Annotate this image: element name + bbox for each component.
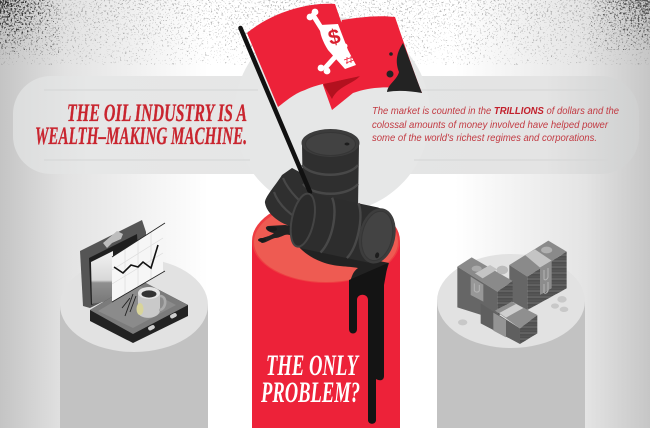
dollar sign: $ [326,25,343,50]
red pedestal [252,199,400,428]
oil spill on red pedestal [258,225,389,285]
flag rear panel [323,16,422,110]
flag front panel [247,4,360,107]
oil drip [349,263,388,424]
pedestal caption: THE ONLY [266,349,360,382]
paragraph: The market is counted in the TRILLIONS of dollars and the [372,105,619,117]
stack rear right [509,241,567,310]
briefcase base [90,280,188,343]
flag pole [240,28,310,192]
speech panel [13,17,639,213]
coins [458,296,568,325]
flag fold [323,76,360,99]
stack front [481,302,537,344]
grunge texture [0,0,650,65]
paragraph: colossal amounts of money involved have helped power [372,119,608,131]
heading: THE OIL INDUSTRY IS A [67,100,247,127]
barrel: tipped over [286,190,401,267]
icon: skull and crossbones [307,9,356,74]
coffee mug [136,287,165,318]
chart stand lines [122,294,136,316]
pedestal caption: PROBLEM? [260,376,360,409]
briefcase lid [80,220,146,308]
barrel: left [265,168,322,228]
paragraph [372,105,619,144]
stack left [457,257,513,320]
right pedestal [437,254,585,428]
oil stain on flag [387,43,422,93]
heading [35,100,247,150]
icon: briefcase [80,220,188,343]
pedestal caption [260,349,360,409]
left pedestal [60,258,208,428]
heading: WEALTH–MAKING MACHINE. [35,123,247,150]
icon: money stacks [457,241,568,344]
barrel: upright [302,129,360,208]
oil drops [386,52,394,78]
paragraph: some of the world's richest regimes and corporations. [372,132,597,144]
flag [247,4,422,110]
chart paper [112,224,163,302]
